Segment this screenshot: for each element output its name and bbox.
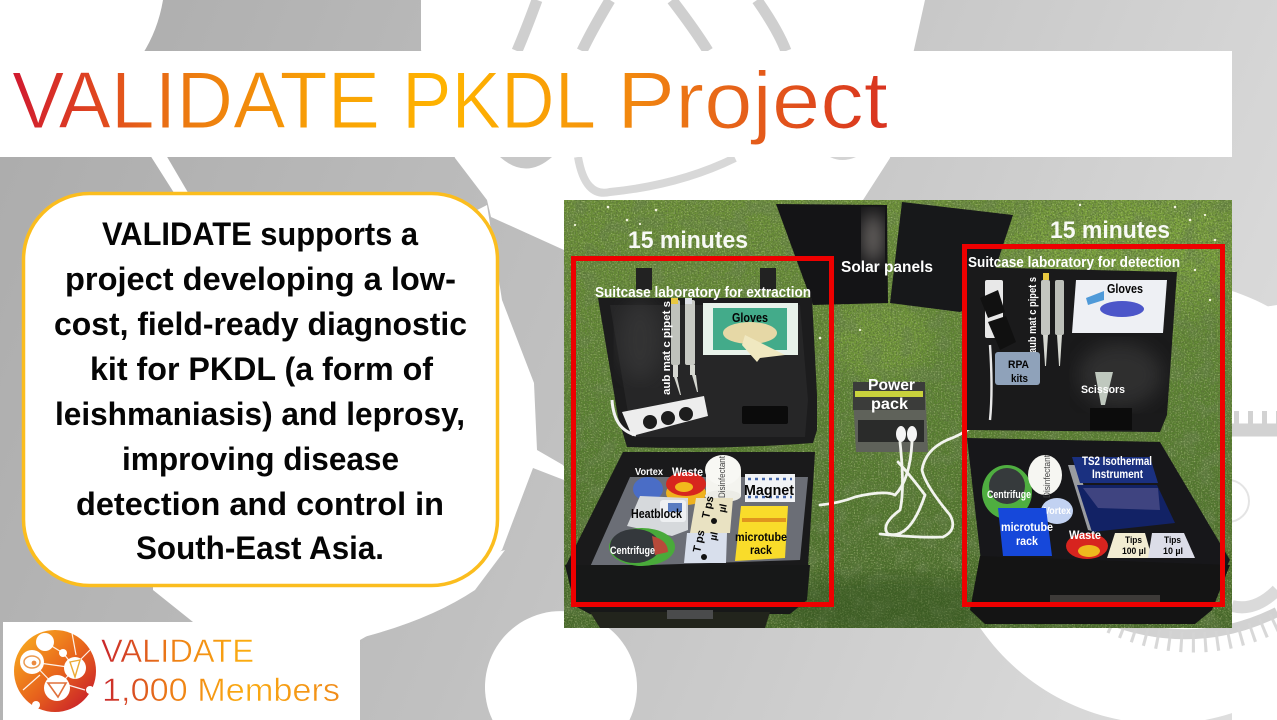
- red box: detection suitcase: [964, 246, 1222, 604]
- base items: vortex, waste, disinfectant: Disinfectant: [717, 456, 728, 498]
- base items: TS2 isothermal instrument: [1068, 456, 1175, 532]
- description text: leishmaniasis) and leprosy,: [55, 396, 465, 432]
- description text: project developing a low-: [65, 261, 456, 297]
- base items: vortex, waste, disinfectant: [633, 455, 741, 505]
- base items: tip boxes: 100 µl: [1122, 546, 1146, 557]
- base items: yellow microtube rack: rack: [750, 543, 772, 557]
- base items: heatblock: [627, 496, 688, 536]
- label: solar panels: Solar panels: [841, 259, 933, 276]
- base items: vortex, waste, disinfectant: Waste: [672, 465, 703, 479]
- photo: suitcase laboratories on grass: [564, 190, 1250, 635]
- lid items: scissors: Scissors: [1081, 384, 1125, 396]
- title: VALIDATE PKDL Project: [12, 56, 888, 146]
- label: suitcase laboratory for extraction: Suitcase laboratory for extraction: [595, 285, 811, 301]
- base items: disinfectant: Disinfectant: [1042, 455, 1053, 498]
- title: VALIDATE PKDL Project: VALIDATE: [12, 56, 380, 146]
- base items: tip boxes: Tips: [1125, 535, 1142, 546]
- base items: centrifuge: Centrifuge: [987, 489, 1031, 501]
- title: VALIDATE PKDL Project: Project: [617, 56, 888, 146]
- power pack: [853, 377, 928, 452]
- lid items: power strip: [980, 280, 1016, 420]
- power pack: Power: [868, 377, 915, 394]
- description text: South-East Asia.: [136, 530, 384, 566]
- lid items: micropipettes: [1027, 273, 1064, 366]
- lid items: power strip and adapter: [612, 396, 788, 436]
- base items: tip boxes: µl: [708, 531, 721, 542]
- lid items: micropipettes: [661, 298, 698, 395]
- description text: [54, 216, 467, 566]
- lid items: RPA kits box: [995, 352, 1040, 385]
- base items: magnet: Magnet: [744, 482, 794, 499]
- label: 15 minutes detection: 15 minutes: [1050, 217, 1170, 244]
- description text: improving disease: [122, 441, 399, 477]
- logo text: VALIDATE: [101, 633, 254, 669]
- description text: cost, field-ready diagnostic: [54, 306, 467, 342]
- base items: tip boxes: 10 µl: [1163, 546, 1183, 557]
- logo text: [101, 633, 340, 708]
- label: 15 minutes extraction: 15 minutes: [628, 227, 748, 254]
- base items: disinfectant: [1028, 455, 1062, 498]
- base items: vortex: [1041, 498, 1073, 524]
- description text: kit for PKDL (a form of: [90, 351, 433, 387]
- panel: project description: [24, 194, 498, 586]
- base items: blue microtube rack: microtube: [1001, 520, 1053, 534]
- lid items: gloves box: [703, 303, 798, 362]
- lid items: gloves box: Gloves: [732, 311, 768, 325]
- solar panels: [776, 202, 1013, 312]
- power pack: pack: [871, 396, 908, 413]
- lid items: scissors: [1081, 372, 1132, 430]
- base items: TS2 isothermal instrument: TS2 Isothermal: [1082, 456, 1152, 468]
- lid items: micropipettes: aub mat c pipet s: [661, 301, 673, 395]
- logo: VALIDATE 1,000 Members: [3, 622, 360, 720]
- logo text: 1,000 Members: [102, 672, 340, 708]
- base items: centrifuge: [982, 465, 1032, 519]
- red box: extraction suitcase: [574, 258, 832, 604]
- lid items: gloves box: [1072, 280, 1167, 333]
- base items: waste bin: [1066, 530, 1108, 559]
- base items: tip boxes: Tips: [1164, 535, 1181, 546]
- label: suitcase laboratory for detection: Suitcase laboratory for detection: [968, 255, 1180, 271]
- base items: TS2 isothermal instrument: Instrument: [1092, 469, 1143, 481]
- base items: yellow microtube rack: microtube: [735, 530, 787, 544]
- description text: VALIDATE supports a: [102, 216, 418, 252]
- base items: magnet: [744, 474, 795, 502]
- suitcase: extraction: [565, 268, 817, 628]
- base items: centrifuge: Centrifuge: [610, 545, 655, 557]
- base items: tip boxes: µl: [717, 503, 730, 514]
- lid items: RPA kits box: RPA: [1008, 359, 1029, 371]
- lid items: RPA kits box: kits: [1011, 373, 1028, 385]
- base items: vortex: Vortex: [1044, 506, 1071, 517]
- base items: centrifuge: [609, 528, 675, 566]
- base items: tip boxes: [684, 495, 733, 563]
- base items: tip boxes: [1107, 533, 1195, 558]
- base items: yellow microtube rack: [735, 506, 788, 561]
- icon: molecular disc: [14, 630, 96, 712]
- power cables: [818, 430, 970, 539]
- base items: tip boxes: T ps: [700, 495, 717, 520]
- description text: detection and control in: [76, 486, 444, 522]
- base items: blue microtube rack: rack: [1016, 534, 1038, 548]
- lid items: gloves box: Gloves: [1107, 282, 1143, 296]
- title band: [0, 51, 1232, 157]
- title: VALIDATE PKDL Project: PKDL: [402, 56, 596, 146]
- base items: heatblock: Heatblock: [631, 507, 682, 521]
- base items: tip boxes: T ps: [691, 529, 708, 554]
- base items: vortex, waste, disinfectant: Vortex: [635, 467, 663, 478]
- base items: waste bin: Waste: [1069, 530, 1101, 542]
- lid items: micropipettes: aub mat c pipet s: [1027, 277, 1039, 353]
- base items: blue microtube rack: [998, 508, 1053, 556]
- suitcase: detection: [967, 267, 1230, 624]
